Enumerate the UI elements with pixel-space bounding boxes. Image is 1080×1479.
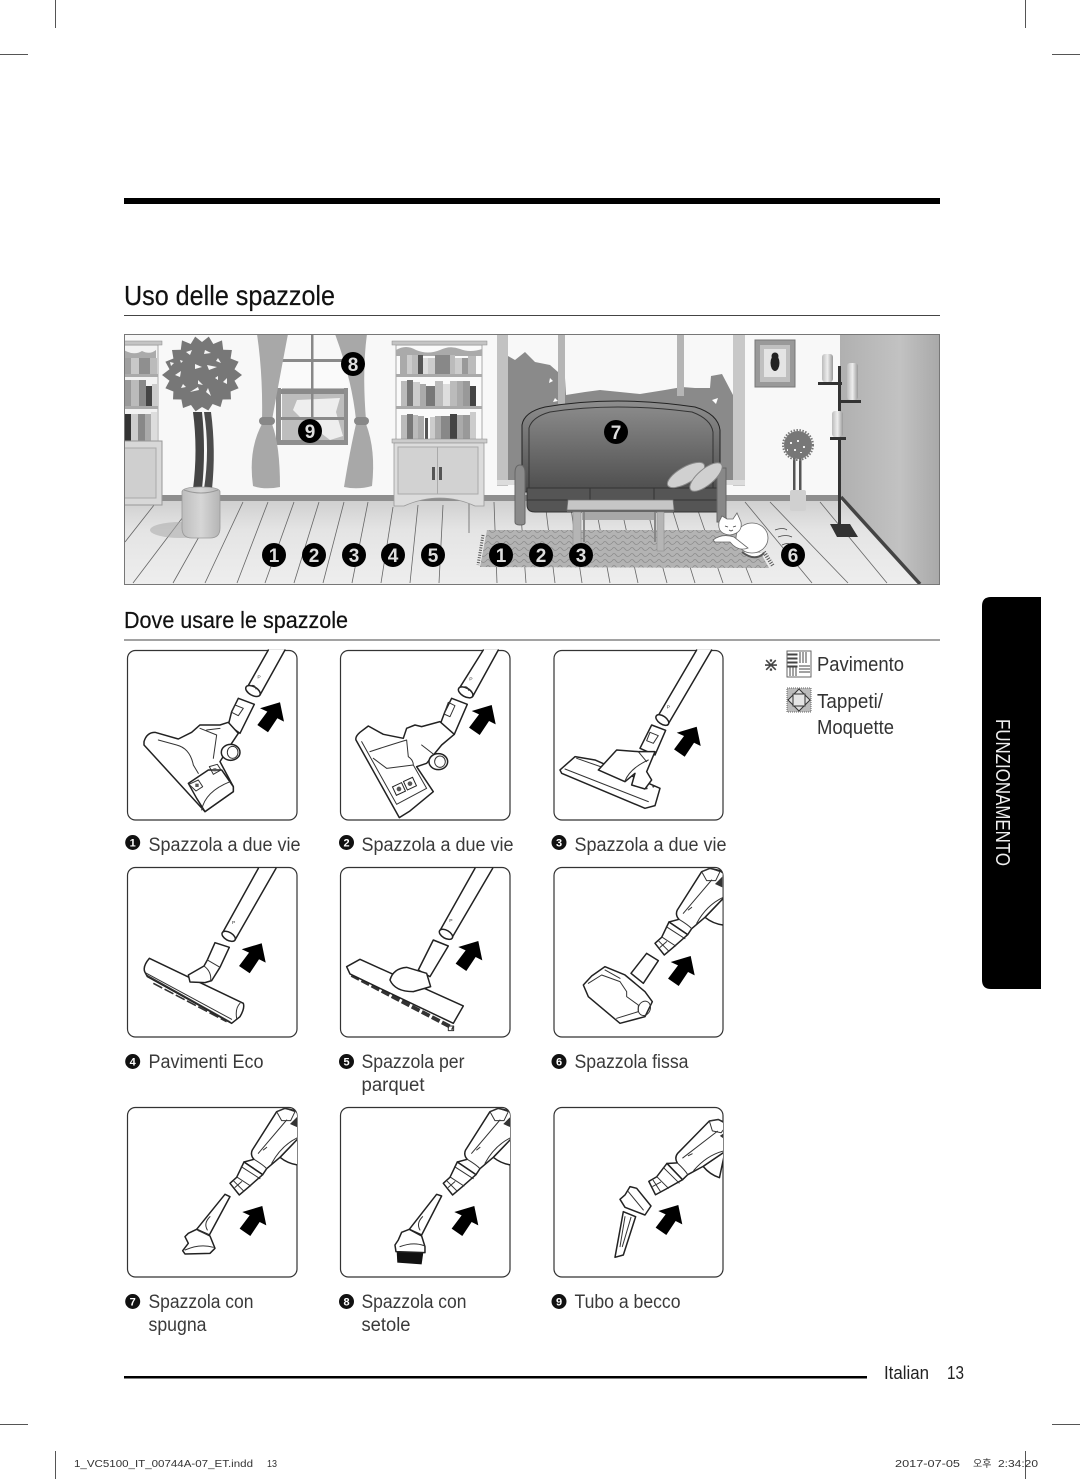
brush 5 [347, 868, 493, 1031]
number markers: 5 [428, 546, 439, 567]
print slug left: 1_VC5100_IT_00744A-07_ET.indd [74, 1459, 253, 1470]
side tab: FUNZIONAMENTO [991, 719, 1013, 866]
arrow [239, 943, 266, 973]
brush 4: P [232, 920, 236, 926]
caption 4: Pavimenti Eco [148, 1052, 264, 1073]
rug [478, 530, 773, 568]
caption 4: 4 [130, 1056, 137, 1068]
handle [443, 1108, 512, 1195]
number markers: 4 [388, 546, 399, 567]
card 3 [554, 650, 723, 820]
title: Uso delle spazzole [124, 280, 335, 311]
print slug right: 2:34:20 [998, 1459, 1039, 1470]
caption 7: Spazzola con [148, 1292, 254, 1313]
brush 1 [144, 650, 285, 812]
legend: Pavimento [817, 654, 904, 676]
caption 7 [125, 1292, 254, 1336]
arrow [240, 1206, 266, 1236]
big window with garden [497, 334, 745, 486]
brush 5: P [449, 918, 453, 924]
arrow [456, 941, 482, 971]
card 7 [128, 1108, 298, 1277]
crevice tool [615, 1187, 651, 1257]
card 9 [554, 1108, 731, 1277]
arrow [257, 702, 284, 732]
caption 2: 2 [343, 838, 350, 850]
small tree [783, 430, 813, 511]
number markers: 3 [576, 546, 586, 567]
sofa [515, 401, 726, 525]
page label [884, 1363, 964, 1383]
coffee table [567, 500, 674, 551]
caption 9: 9 [556, 1296, 562, 1308]
legend: Moquette [817, 717, 894, 739]
number markers: 1 [496, 546, 507, 567]
number markers: 9 [305, 422, 315, 443]
arrow [668, 956, 695, 986]
number markers: 1 [269, 546, 280, 567]
brush 1: P [257, 675, 261, 681]
floor [124, 500, 930, 585]
handle [648, 1118, 723, 1196]
number markers: 6 [788, 546, 798, 567]
number markers: 8 [348, 355, 358, 376]
brush 6 [583, 953, 658, 1023]
number markers: 7 [611, 423, 621, 444]
caption 3: 3 [556, 838, 562, 850]
caption 3: Spazzola a due vie [574, 835, 726, 856]
caption 7: 7 [130, 1296, 136, 1308]
caption 8: setole [362, 1315, 410, 1336]
section heading: Dove usare le spazzole [124, 607, 348, 633]
arrow [674, 727, 701, 757]
card 5 [340, 868, 510, 1037]
print slug right: 2017-07-05 [895, 1459, 961, 1470]
card 8 [340, 1108, 512, 1277]
icon: carpet [787, 688, 811, 712]
flower pot [150, 487, 220, 538]
left bookshelf [124, 341, 162, 505]
caption 8: 8 [343, 1296, 350, 1308]
card 1 [128, 650, 297, 820]
sponge brush [183, 1194, 230, 1254]
caption 9: Tubo a becco [574, 1292, 680, 1313]
caption 1: Spazzola a due vie [148, 835, 300, 856]
brush 3 [560, 650, 712, 808]
handle [655, 868, 723, 955]
bookshelf [392, 341, 487, 506]
top black bar [124, 198, 940, 204]
caption 5: parquet [362, 1075, 425, 1096]
brush 4 [144, 868, 276, 1023]
cat [713, 513, 792, 557]
card 6 [554, 868, 723, 1037]
tree [162, 337, 242, 489]
card 4 [128, 868, 297, 1037]
print slug right [895, 1458, 1039, 1470]
footer rule [124, 1376, 867, 1378]
arrow [452, 1206, 478, 1236]
caption 7: spugna [148, 1315, 207, 1336]
print slug left: 13 [267, 1459, 277, 1470]
number markers: 2 [309, 546, 319, 567]
number markers: 3 [349, 546, 359, 567]
caption 8 [339, 1292, 466, 1336]
caption 1: 1 [130, 838, 136, 850]
window [276, 334, 348, 445]
caption 6: Spazzola fissa [574, 1052, 689, 1073]
card 2 [340, 650, 510, 820]
side tab [982, 597, 1041, 989]
brush 3: P [667, 704, 671, 710]
caption 8: Spazzola con [362, 1292, 466, 1313]
brush 2: P [469, 676, 473, 682]
right side wall [840, 334, 940, 585]
number markers: 2 [536, 546, 546, 567]
caption 2: Spazzola a due vie [362, 835, 514, 856]
illustration: living room [124, 334, 940, 585]
bristle brush [395, 1194, 442, 1264]
caption 5: 5 [343, 1056, 350, 1068]
brush 2 [356, 650, 498, 818]
arrow [469, 705, 496, 735]
print slug right: 오후 [973, 1458, 991, 1470]
curtains [252, 334, 373, 488]
handle [230, 1108, 298, 1195]
arrow [656, 1205, 682, 1235]
caption 5: Spazzola per [362, 1052, 465, 1073]
number markers [262, 352, 805, 567]
caption 6: 6 [556, 1056, 562, 1068]
legend: ⋇ [763, 655, 779, 676]
icon: floor [787, 651, 811, 677]
legend [763, 651, 904, 739]
caption 5 [339, 1052, 465, 1096]
page label: Italian [884, 1363, 929, 1383]
floor lamp [818, 354, 861, 537]
framed picture [755, 340, 795, 387]
page label: 13 [947, 1363, 964, 1383]
baseboard [124, 495, 840, 501]
legend: Tappeti/ [817, 691, 883, 713]
